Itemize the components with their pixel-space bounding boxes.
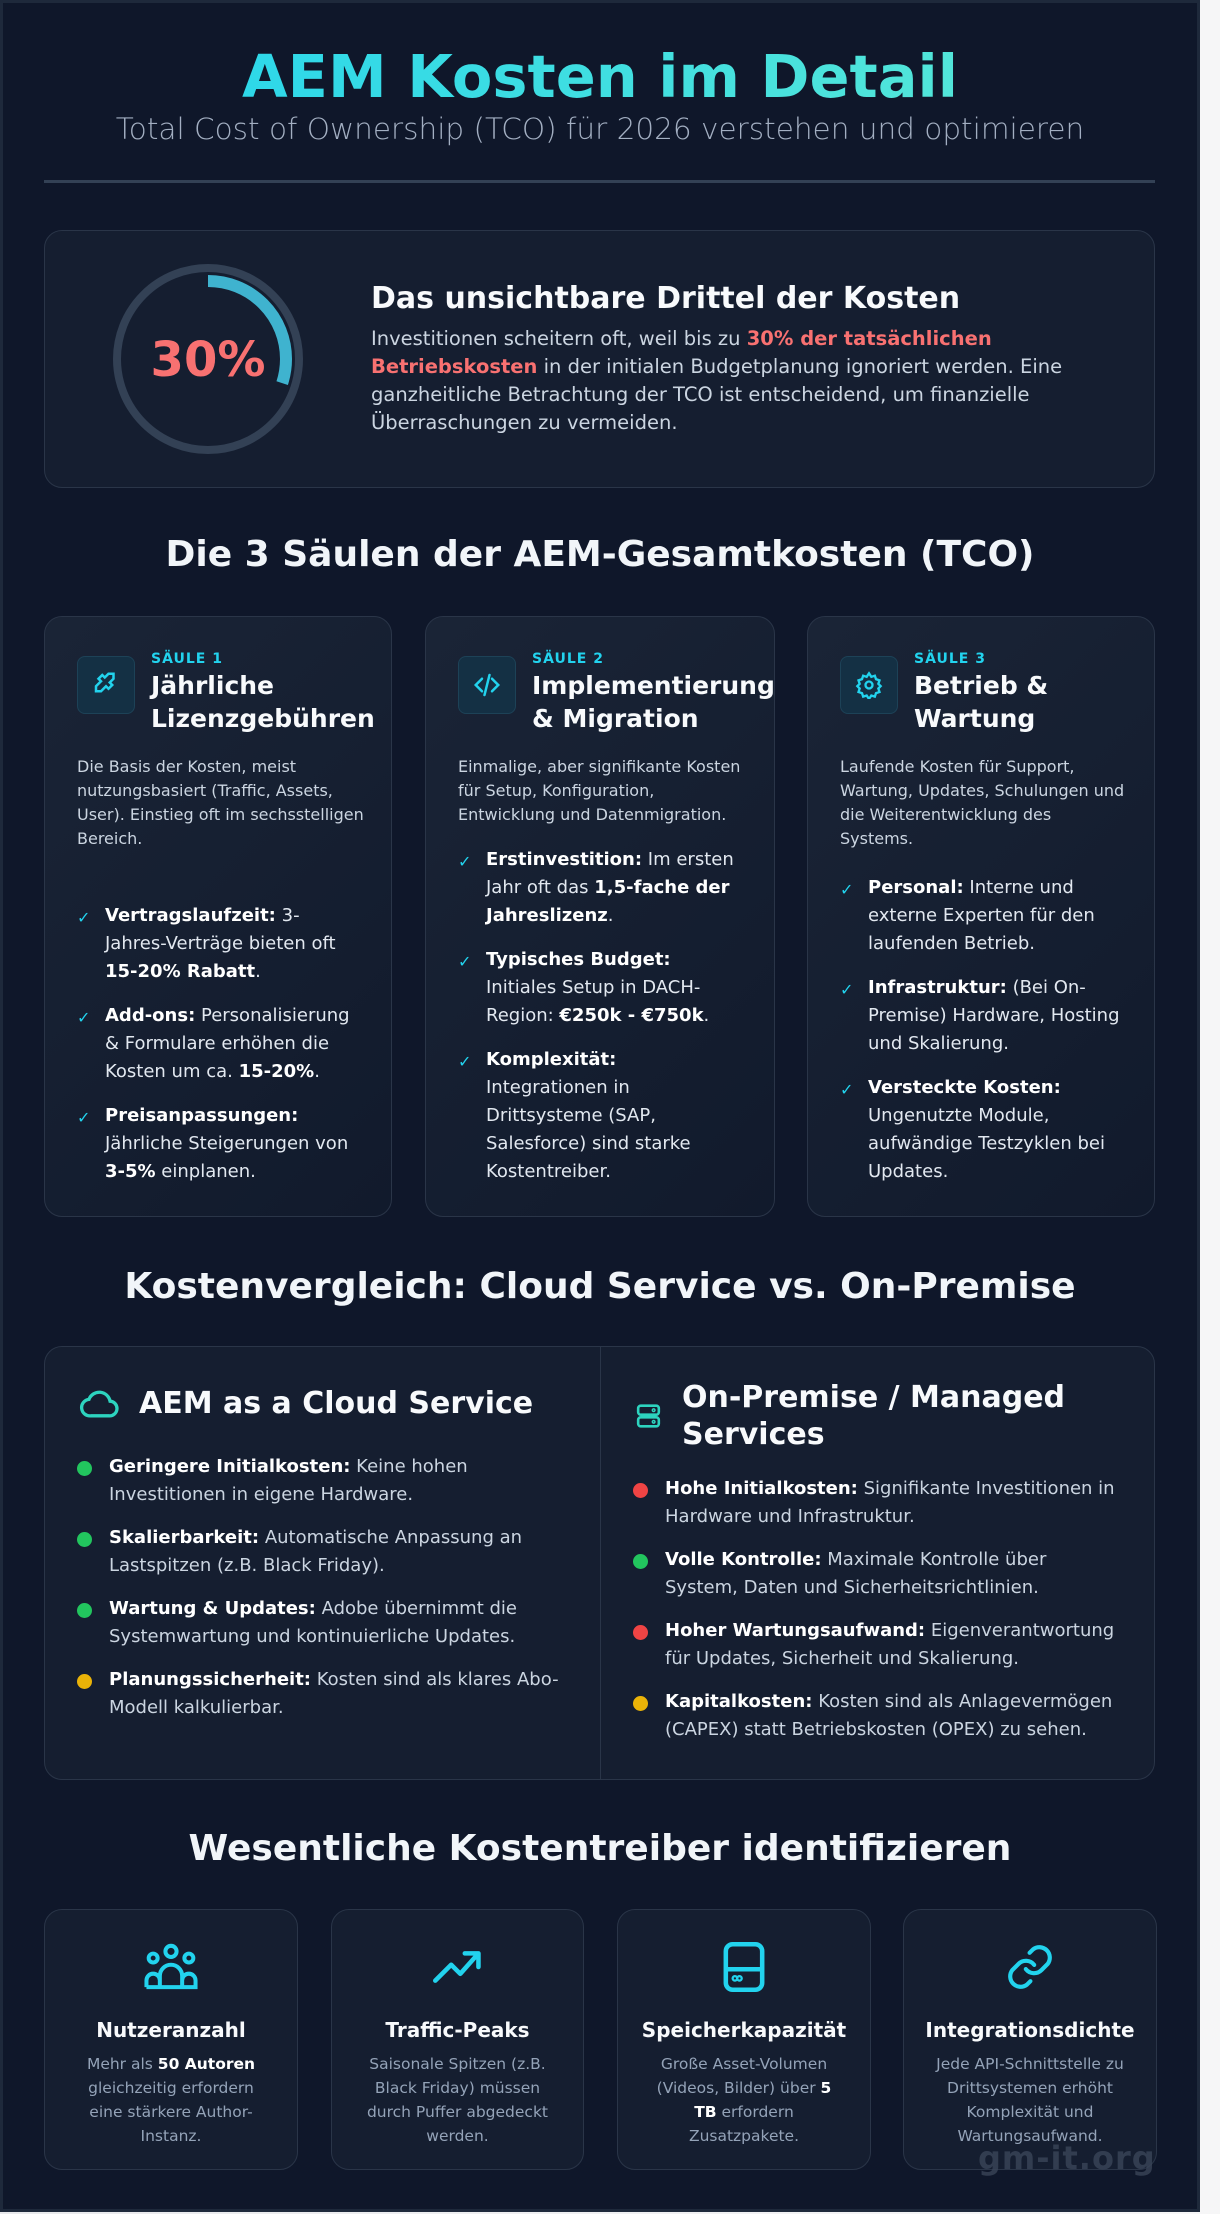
column: on-premise: Kapitalkosten: Kosten sind als Anlagevermögen (CAPEX) statt Betriebskosten (OPEX) zu sehen. <box>665 1691 1112 1740</box>
panel: pillar 2: Komplexität: <box>486 1049 616 1070</box>
panel: pillar 1: SÄULE 1 <box>151 651 223 667</box>
card: Integrationsdichte: Jede API-Schnittstelle zu Drittsystemen erhöht Komplexität und Wartungsaufwand. <box>936 2055 1124 2145</box>
panel: hero <box>44 230 1155 488</box>
card: Speicherkapazität: Speicherkapazität <box>642 2018 846 2042</box>
panel: pillar 1: Jährliche Lizenzgebühren <box>151 671 375 733</box>
card: Speicherkapazität <box>617 1909 871 2170</box>
panel: pillar 3: SÄULE 3 <box>914 651 986 667</box>
title: AEM Kosten im Detail <box>242 42 958 111</box>
column: on-premise: On-Premise / Managed Services <box>682 1380 1065 1452</box>
column: on-premise <box>633 1380 1115 1740</box>
card: Integrationsdichte: Integrationsdichte <box>925 2018 1135 2042</box>
panel: pillar 2: Integrationen in Drittsysteme (SAP, Salesforce) sind starke Kostentreiber. <box>486 1077 691 1182</box>
icon: license <box>77 656 135 714</box>
icon: link <box>1008 1945 1052 1989</box>
column: cloud: Planungssicherheit: Kosten sind als klares Abo-Modell kalkulierbar. <box>109 1669 559 1718</box>
card: Nutzeranzahl <box>44 1909 298 2170</box>
heading: comparison: Kostenvergleich: Cloud Service vs. On-Premise <box>124 1266 1076 1307</box>
panel: pillar 3: Infrastruktur: (Bei On-Premise) Hardware, Hosting und Skalierung. <box>868 977 1120 1054</box>
column: cloud <box>77 1386 559 1718</box>
panel: pillar 3 <box>807 616 1155 1217</box>
card: Integrationsdichte <box>903 1909 1157 2170</box>
hero text: Investitionen scheitern oft, weil bis zu 30% der tatsächlichen Betriebskosten in der initialen Budgetplanung ignoriert werden. Eine ganzheitliche Betrachtung der TCO ist entscheidend, um finanzielle Überraschungen zu vermeiden. <box>371 327 1062 434</box>
icon: server <box>636 1404 660 1428</box>
icon: cloud <box>80 1390 119 1418</box>
card: Speicherkapazität: Große Asset-Volumen (Videos, Bilder) über 5 TB erfordern Zusatzpakete. <box>657 2055 831 2145</box>
ring chart 30%: 30% <box>151 332 265 388</box>
panel: pillar 3: Laufende Kosten für Support, Wartung, Updates, Schulungen und die Weiterentwicklung des Systems. <box>840 757 1124 848</box>
icon: users <box>144 1944 198 1990</box>
panel: pillar 2: Typisches Budget: Initiales Setup in DACH-Region: €250k - €750k. <box>486 949 709 1026</box>
panel: pillar 2: SÄULE 2 <box>532 651 604 667</box>
panel: comparison <box>44 1346 1155 1780</box>
heading: drivers: Wesentliche Kostentreiber identifizieren <box>189 1828 1011 1869</box>
panel: pillar 3: Betrieb & Wartung <box>914 671 1048 733</box>
panel: pillar 3: Personal: Interne und externe Experten für den laufenden Betrieb. <box>868 877 1095 954</box>
watermark: gm-it.org <box>978 2139 1156 2177</box>
card: Nutzeranzahl: Nutzeranzahl <box>96 2018 246 2042</box>
card: Traffic-Peaks: Saisonale Spitzen (z.B. Black Friday) müssen durch Puffer abgedeckt werden. <box>367 2055 548 2145</box>
icon: gear <box>840 656 898 714</box>
column: cloud: AEM as a Cloud Service <box>139 1386 533 1420</box>
panel: pillar 1: Vertragslaufzeit: 3-Jahres-Verträge bieten oft 15-20% Rabatt. <box>105 905 336 982</box>
column: cloud: Skalierbarkeit: Automatische Anpassung an Lastspitzen (z.B. Black Friday). <box>109 1527 522 1576</box>
panel: pillar 1 <box>44 616 392 1217</box>
panel: pillar 1: Die Basis der Kosten, meist nutzungsbasiert (Traffic, Assets, User). Einstieg oft im sechsstelligen Bereich. <box>77 757 364 848</box>
ring chart 30% <box>113 264 303 454</box>
panel: pillar 2: Erstinvestition: Im ersten Jahr oft das 1,5-fache der Jahreslizenz. <box>486 849 734 926</box>
column: on-premise: Volle Kontrolle: Maximale Kontrolle über System, Daten und Sicherheitsrichtlinien. <box>665 1549 1046 1598</box>
panel: pillar 1: Add-ons: Personalisierung & Formulare erhöhen die Kosten um ca. 15-20%. <box>105 1005 350 1082</box>
heading: pillars: Die 3 Säulen der AEM-Gesamtkosten (TCO) <box>165 534 1035 575</box>
panel: pillar 2 <box>425 616 775 1217</box>
card: Traffic-Peaks <box>331 1909 584 2170</box>
card: Nutzeranzahl: Mehr als 50 Autoren gleichzeitig erfordern eine stärkere Author-Instanz. <box>87 2055 255 2145</box>
subtitle: Total Cost of Ownership (TCO) für 2026 verstehen und optimieren <box>116 112 1084 146</box>
title <box>3 39 1197 115</box>
panel: pillar 3: Versteckte Kosten: Ungenutzte Module, aufwändige Testzyklen bei Updates. <box>868 1077 1105 1182</box>
card: Traffic-Peaks: Traffic-Peaks <box>385 2018 530 2042</box>
column: cloud: Wartung & Updates: Adobe übernimmt die Systemwartung und kontinuierliche Updates. <box>109 1598 517 1647</box>
hero heading: Das unsichtbare Drittel der Kosten <box>371 281 960 316</box>
column: on-premise: Hohe Initialkosten: Signifikante Investitionen in Hardware und Infrastruktur. <box>665 1478 1115 1527</box>
panel: pillar 1: Preisanpassungen: Jährliche Steigerungen von 3-5% einplanen. <box>105 1105 348 1182</box>
icon: code <box>458 656 516 714</box>
column: cloud: Geringere Initialkosten: Keine hohen Investitionen in eigene Hardware. <box>109 1456 468 1505</box>
icon: trend <box>433 1951 481 1983</box>
panel: pillar 2: Implementierung & Migration <box>532 671 775 733</box>
column: on-premise: Hoher Wartungsaufwand: Eigenverantwortung für Updates, Sicherheit und Skalierung. <box>665 1620 1114 1669</box>
icon: storage <box>724 1942 764 1992</box>
panel: pillar 2: Einmalige, aber signifikante Kosten für Setup, Konfiguration, Entwicklung und Datenmigration. <box>458 757 740 824</box>
